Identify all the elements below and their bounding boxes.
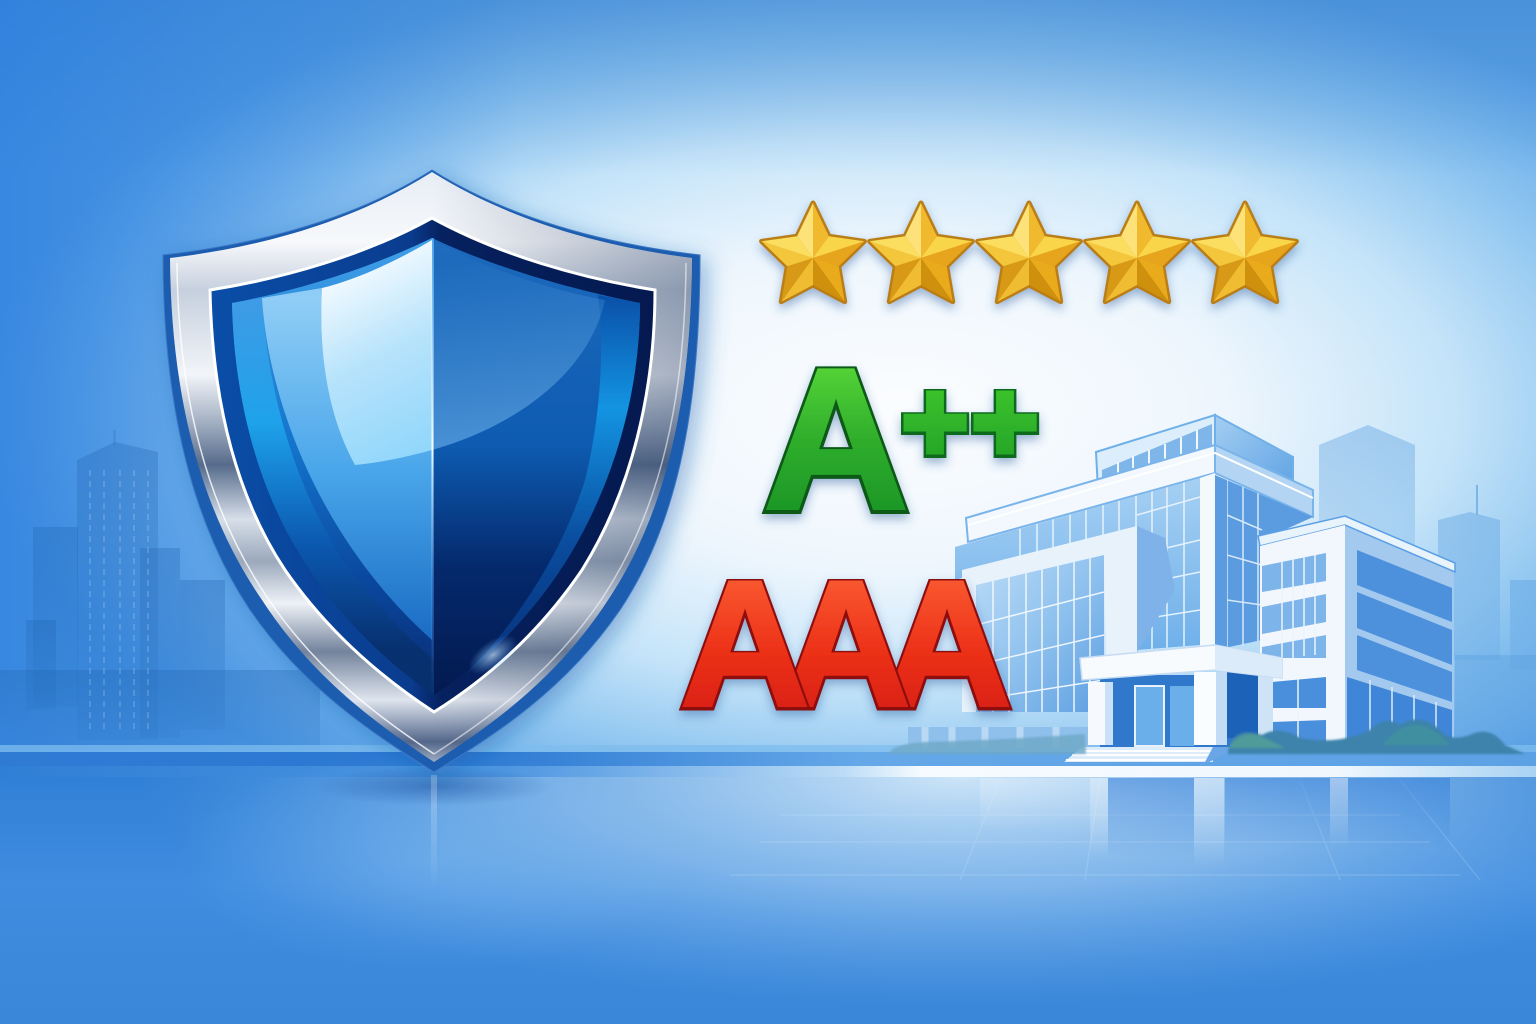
shield: silver frame — [170, 172, 692, 762]
plus signs: + — [971, 356, 1039, 486]
building: column side — [1137, 526, 1175, 652]
right city skyline — [1319, 425, 1536, 750]
star rating — [762, 203, 1296, 302]
rating AAA: A — [782, 545, 910, 744]
floor — [0, 768, 1536, 1024]
shield — [163, 170, 700, 772]
shield: outer blue rim — [163, 170, 700, 772]
rating AAA: A — [883, 545, 1011, 744]
building: roof slab — [966, 445, 1313, 542]
building — [908, 415, 1455, 764]
building: right wing front — [1258, 516, 1455, 748]
building: steps — [1064, 747, 1240, 764]
letter A green: A — [764, 329, 908, 552]
shield: left panel — [232, 238, 434, 695]
building: white frame — [962, 526, 1137, 712]
shield: inner dark border — [210, 218, 655, 712]
star 2 — [870, 203, 972, 302]
rating AAA: A — [883, 544, 1011, 743]
shield reflection — [174, 750, 694, 970]
building: upper glass front — [955, 470, 1200, 660]
floor grid — [730, 780, 1480, 880]
plus signs: + — [901, 357, 969, 487]
building: low left podium — [908, 727, 1090, 748]
star 5 — [1194, 203, 1296, 302]
building: right glass — [1215, 475, 1313, 650]
rating A++ — [764, 328, 1039, 552]
rating AAA: A — [681, 545, 809, 744]
building: penthouse — [1096, 415, 1293, 490]
plus signs: + — [971, 357, 1039, 487]
building: lower glass — [976, 550, 1104, 720]
left city skyline — [0, 430, 320, 750]
shield: lens flare — [462, 627, 524, 683]
star 3 — [978, 203, 1080, 302]
star 1 — [762, 203, 864, 302]
building: right wing side — [1345, 520, 1454, 745]
rating AAA — [681, 544, 1011, 744]
shield: right panel — [432, 238, 640, 695]
building: corner pillar — [1200, 473, 1215, 650]
plus signs — [901, 356, 1039, 487]
shrubs — [890, 720, 1525, 754]
building reflection — [980, 778, 1450, 868]
building: canopy — [1080, 645, 1282, 680]
star 4 — [1086, 203, 1188, 302]
floor glow — [0, 768, 1536, 1024]
building: entrance — [1088, 670, 1273, 747]
letter A green: A — [764, 328, 908, 551]
horizon bands — [0, 745, 1536, 777]
rating AAA: A — [681, 544, 809, 743]
shield: centre ridge — [432, 238, 434, 695]
rating AAA: A — [782, 544, 910, 743]
plus signs: + — [901, 356, 969, 486]
